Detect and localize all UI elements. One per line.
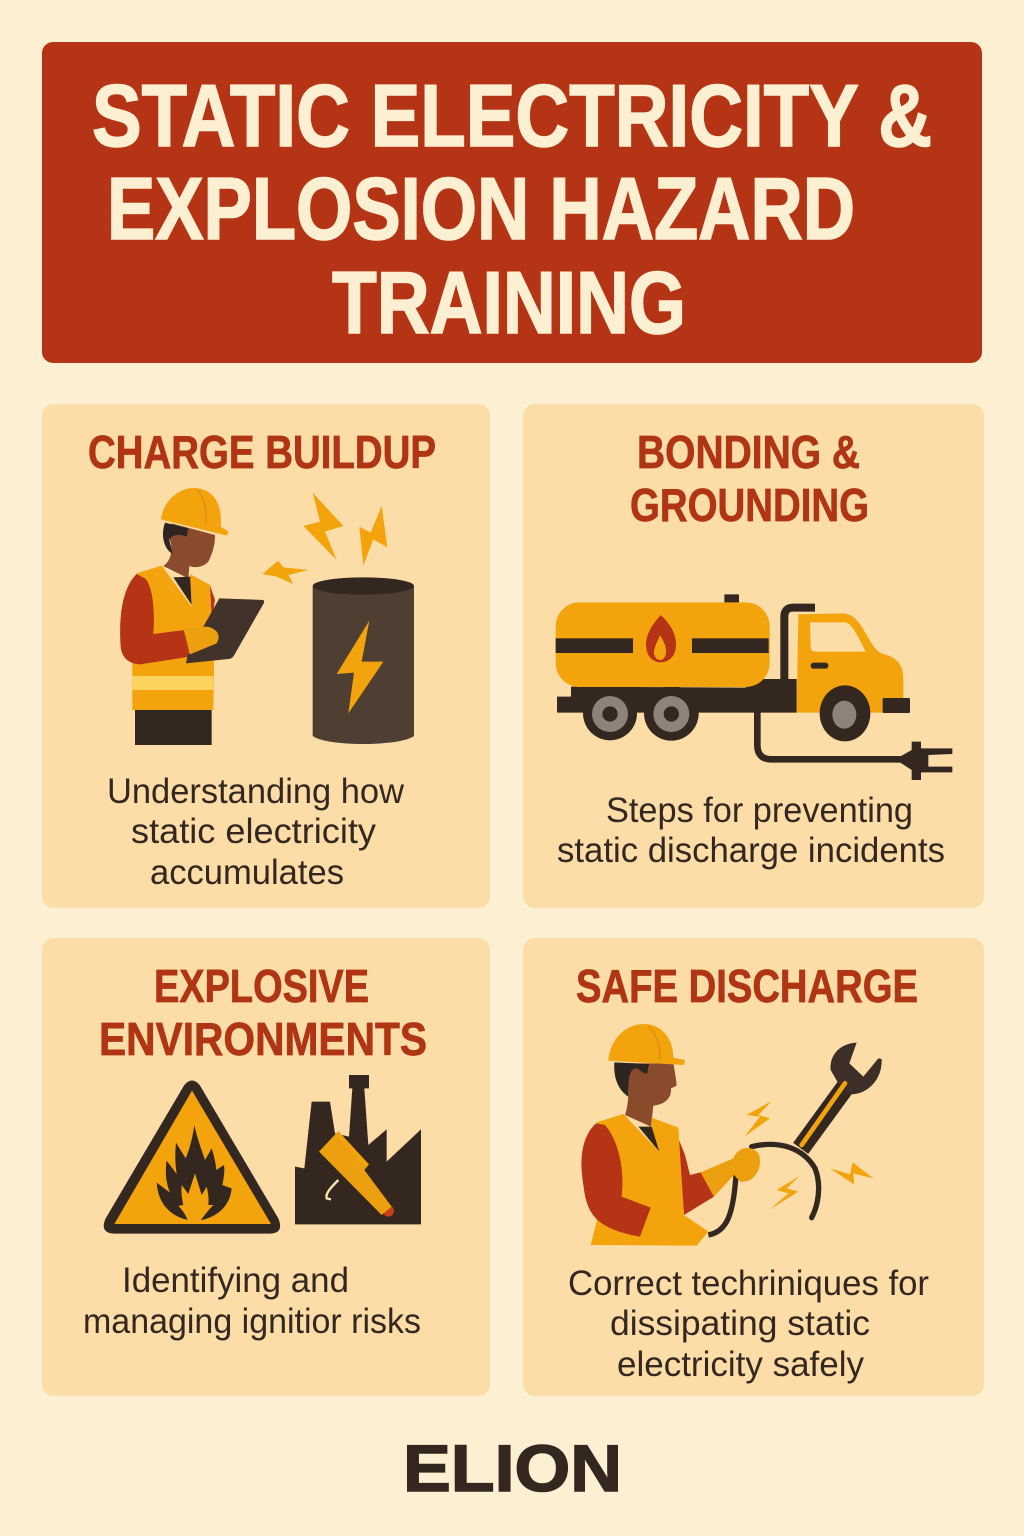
panel: charge buildup [42,404,490,908]
heading: safe discharge: SAFE DISCHARGE [576,960,918,1012]
title banner [42,42,982,363]
panel: explosive environments [42,938,490,1396]
heading: explosive environments: EXPLOSIVE [154,960,369,1012]
heading: bonding and grounding [630,426,869,531]
caption: charge buildup: accumulates [150,853,344,892]
caption: charge buildup [107,772,405,892]
title banner: TRAINING [332,253,686,352]
caption: charge buildup: static electricity [131,812,377,851]
caption: charge buildup: Understanding how [107,772,405,811]
panel: bonding and grounding [523,404,984,908]
brand logo text: ELION [403,1431,622,1505]
icon: charged drum with sparks [262,493,414,744]
title banner: EXPLOSION HAZARD [107,159,855,258]
caption: bonding and grounding [557,791,945,870]
caption: safe discharge [568,1264,929,1384]
panel: safe discharge [523,938,984,1396]
caption: explosive environments: managing ignitior risks [83,1302,421,1341]
heading: explosive environments: ENVIRONMENTS [99,1013,427,1065]
heading: bonding and grounding: GROUNDING [630,479,869,531]
icon: tanker truck with ground plug [556,594,952,780]
caption: bonding and grounding: static discharge incidents [557,831,945,870]
icon: worker with grounding cable and wrench [581,1024,882,1246]
caption: safe discharge: dissipating static [610,1304,870,1343]
heading: bonding and grounding: BONDING & [637,426,860,478]
caption: safe discharge: Correct techriniques for [568,1264,929,1303]
caption: bonding and grounding: Steps for preventing [606,791,913,830]
caption: safe discharge: electricity safely [617,1345,864,1384]
icon: factory with igniter [295,1075,421,1224]
caption: explosive environments [83,1261,421,1341]
heading: charge buildup: CHARGE BUILDUP [88,426,436,478]
icon: worker with tablet [120,488,264,745]
heading: explosive environments [99,960,427,1065]
caption: explosive environments: Identifying and [122,1261,349,1300]
icon: flammable warning triangle [104,1080,280,1234]
